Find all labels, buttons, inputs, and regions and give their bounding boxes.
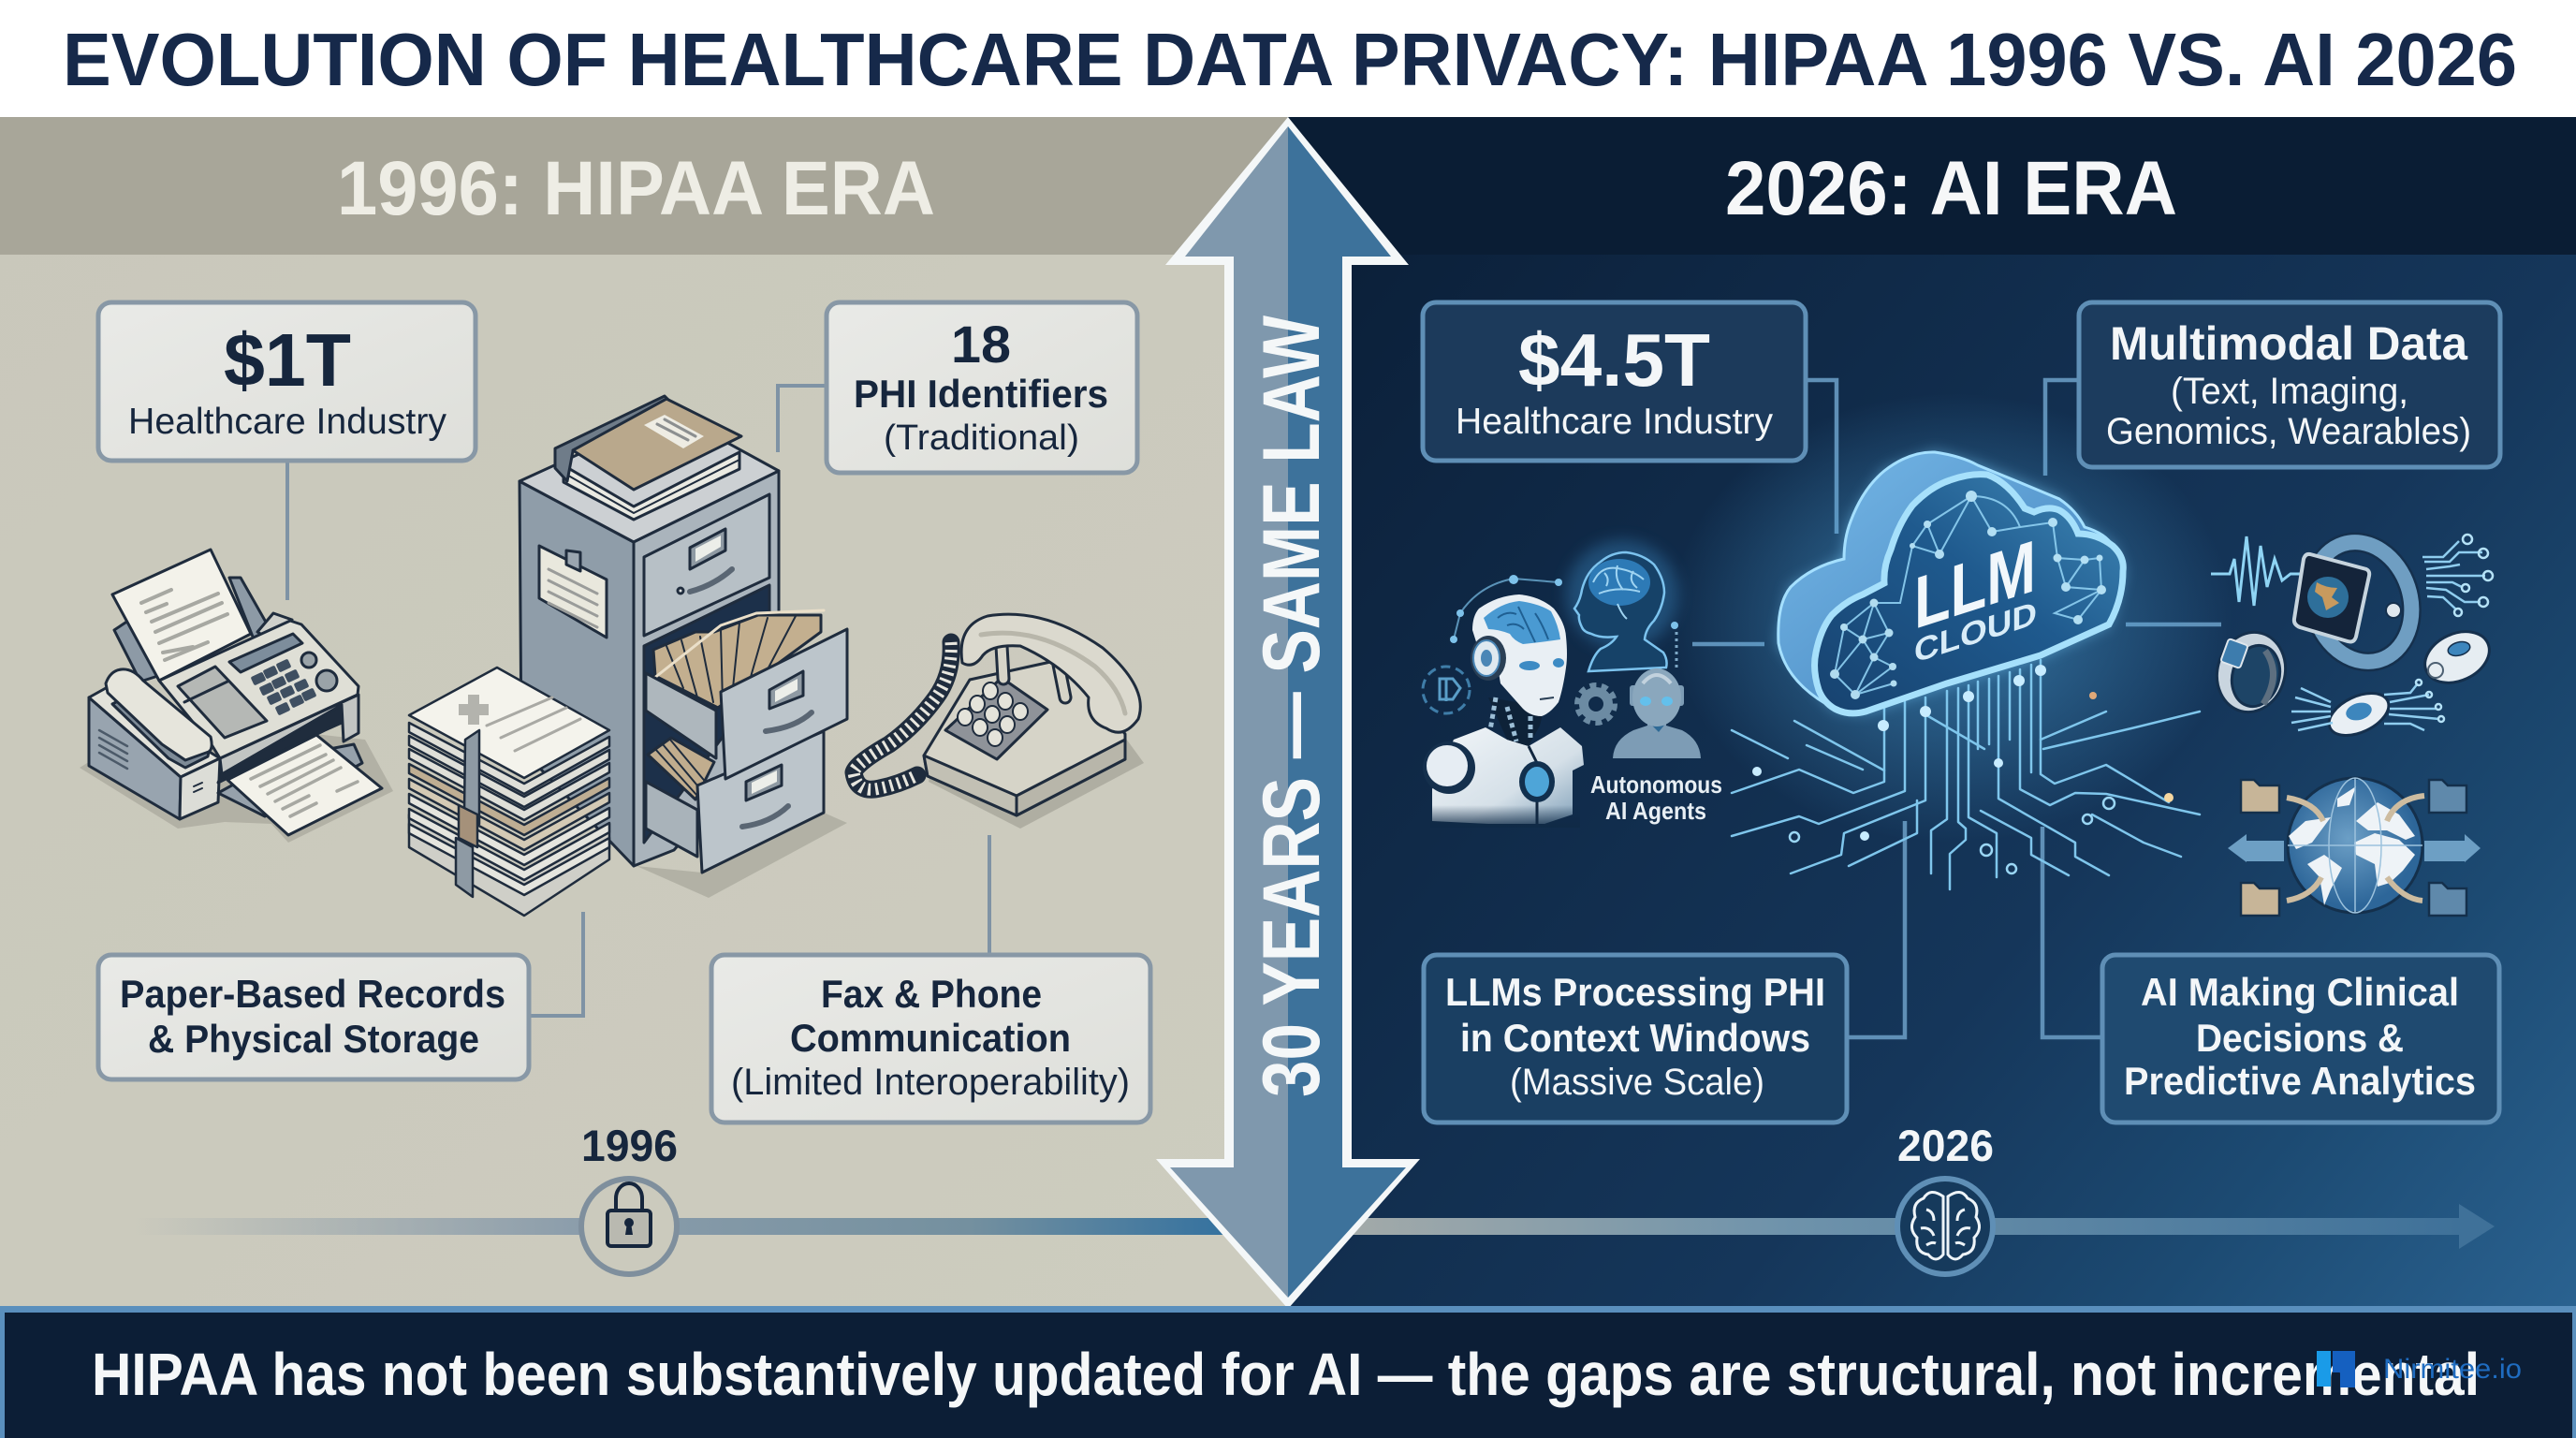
callout: paper-based records xyxy=(98,955,529,1079)
callout: AI making clinical decisions: Predictive Analytics xyxy=(2124,1059,2476,1103)
callout: LLMs processing PHI xyxy=(1424,955,1847,1123)
icon: brain xyxy=(1911,1192,1980,1259)
callout: 18 PHI identifiers: (Traditional) xyxy=(884,418,1079,458)
binder on top xyxy=(555,396,741,520)
footer banner xyxy=(0,1306,2576,1438)
arrow label: 30 YEARS — SAME LAW xyxy=(1247,315,1337,1097)
middle open drawer xyxy=(646,610,847,779)
callout: 18 PHI identifiers: PHI Identifiers xyxy=(854,372,1108,416)
callout: AI making clinical decisions: Decisions & xyxy=(2196,1016,2404,1060)
callout: multimodal data: Genomics, Wearables) xyxy=(2106,411,2471,452)
cloud back xyxy=(1778,452,2113,709)
connector lines: right panel xyxy=(1692,380,2221,1037)
panel: 2026 AI era xyxy=(1288,117,2576,1308)
callout: 18 PHI identifiers xyxy=(827,302,1137,473)
title bar xyxy=(0,0,2576,117)
callout: fax and phone communication: Fax & Phone xyxy=(821,972,1042,1016)
callout: LLMs processing PHI: LLMs Processing PHI xyxy=(1445,970,1825,1014)
timeline: 2026 xyxy=(1329,1121,2495,1274)
icon: autonomous AI agents: Autonomous xyxy=(1590,770,1722,799)
icon: rotary desk phone xyxy=(854,614,1144,829)
arrow: double-headed 30 years same law xyxy=(1156,117,1420,1309)
callout: fax and phone communication: Communication xyxy=(790,1016,1071,1060)
robot body xyxy=(1432,727,1584,824)
icon: padlock xyxy=(607,1183,651,1246)
callout: multimodal data xyxy=(2079,302,2500,467)
callout: $1T healthcare industry: Healthcare Industry xyxy=(128,402,446,442)
icon: filing cabinet xyxy=(520,396,847,898)
callout: paper-based records: Paper-Based Records xyxy=(120,972,505,1016)
cloud: LLM cloud: CLOUD xyxy=(1914,594,2037,670)
callout: $4.5T healthcare industry xyxy=(1423,302,1806,461)
callout: $1T healthcare industry xyxy=(98,302,476,461)
circuit traces under the cloud xyxy=(1671,393,2232,889)
robot head xyxy=(1472,594,1567,716)
callout: multimodal data: (Text, Imaging, xyxy=(2171,371,2408,412)
callout: fax and phone communication xyxy=(711,955,1150,1123)
button sensor xyxy=(2322,684,2395,744)
gear xyxy=(1577,685,1615,723)
callout: $4.5T healthcare industry: Healthcare Industry xyxy=(1456,402,1773,442)
icon: autonomous AI agents xyxy=(1423,540,1722,828)
data lines xyxy=(2291,541,2485,730)
callout: paper-based records: & Physical Storage xyxy=(148,1017,479,1061)
callout: fax and phone communication: (Limited Interoperability) xyxy=(731,1062,1130,1103)
icon: wearables xyxy=(2208,529,2497,744)
icon: globe with data flow xyxy=(2228,778,2481,916)
cloud network xyxy=(1830,491,2106,699)
header: 2026 AI era xyxy=(1288,117,2576,255)
icon: paper stack xyxy=(409,668,609,916)
timeline: 2026: 2026 xyxy=(1897,1121,1994,1170)
ring xyxy=(2208,624,2294,720)
callout: $4.5T healthcare industry: $4.5T xyxy=(1518,318,1710,402)
header: 1996 HIPAA era: 1996: HIPAA ERA xyxy=(337,146,935,231)
head silhouette with brain xyxy=(1566,540,1678,671)
sensor patch xyxy=(2417,622,2497,693)
waveform xyxy=(2211,536,2301,606)
lower open drawer xyxy=(646,731,824,873)
icon: fax machine xyxy=(80,550,393,843)
callout: LLMs processing PHI: (Massive Scale) xyxy=(1510,1062,1764,1103)
timeline: 1996 xyxy=(134,1121,1248,1274)
network and rings xyxy=(1423,667,1470,713)
title bar: EVOLUTION OF HEALTHCARE DATA PRIVACY: HIPAA 1996 VS. AI 2026 xyxy=(63,18,2517,101)
logo: Nirmitee.io: Nirmitee.io xyxy=(2383,1354,2522,1385)
connector lines: left panel xyxy=(287,386,989,1016)
flow arrows xyxy=(2287,796,2424,901)
timeline: 1996: 1996 xyxy=(581,1121,678,1170)
callout: LLMs processing PHI: in Context Windows xyxy=(1460,1016,1810,1060)
small robot xyxy=(1613,668,1701,758)
icon: autonomous AI agents: AI Agents xyxy=(1605,797,1706,825)
header: 1996 HIPAA era xyxy=(0,117,1288,255)
callout: AI making clinical decisions: AI Making Clinical xyxy=(2141,970,2459,1014)
callout: AI making clinical decisions xyxy=(2102,955,2499,1123)
callout: $1T healthcare industry: $1T xyxy=(224,318,351,402)
cloud: LLM cloud: LLM xyxy=(1914,524,2036,645)
folders xyxy=(2241,780,2279,916)
cloud: LLM cloud xyxy=(1778,452,2123,713)
cloud face xyxy=(1815,475,2123,713)
callout: multimodal data: Multimodal Data xyxy=(2110,317,2468,370)
panel: 1996 HIPAA era xyxy=(0,117,1288,1308)
header: 2026 AI era: 2026: AI ERA xyxy=(1725,146,2177,231)
logo: Nirmitee.io xyxy=(2317,1351,2522,1387)
watch xyxy=(2296,529,2427,675)
callout: 18 PHI identifiers: 18 xyxy=(951,315,1011,374)
